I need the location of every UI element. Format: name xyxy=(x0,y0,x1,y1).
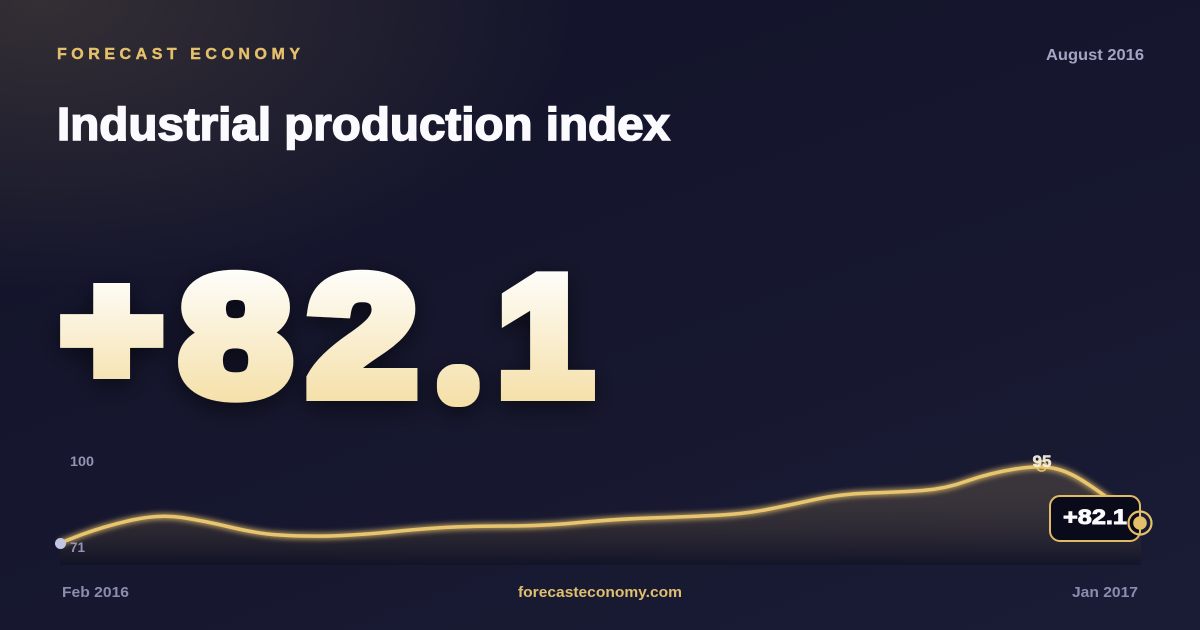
big value xyxy=(62,241,593,430)
chart area fill xyxy=(60,467,1141,565)
badge value: +82.1 xyxy=(1063,506,1127,529)
end marker xyxy=(1128,512,1152,534)
website: forecasteconomy.com xyxy=(518,585,682,601)
start date: Feb 2016 xyxy=(62,585,129,601)
digit 2: 2 xyxy=(308,241,417,430)
peak marker xyxy=(1036,461,1046,471)
axis label min: 71 xyxy=(70,540,86,555)
digit 8: 8 xyxy=(180,243,291,430)
plus sign: + xyxy=(62,241,161,417)
badge box xyxy=(1050,496,1140,541)
decimal point: . xyxy=(453,354,464,398)
line glow xyxy=(60,467,1140,543)
peak label: 95 xyxy=(1033,452,1051,471)
date: August 2016 xyxy=(1046,47,1144,64)
brand label: FORECAST ECONOMY xyxy=(57,46,300,63)
digit 1: 1 xyxy=(497,242,593,430)
end marker dot xyxy=(1133,516,1147,530)
end date: Jan 2017 xyxy=(1072,585,1138,601)
end marker ring xyxy=(1128,512,1152,534)
title: Industrial production index xyxy=(57,98,670,150)
start point xyxy=(55,538,66,549)
data line xyxy=(60,467,1140,543)
value badge xyxy=(1050,496,1140,541)
line chart xyxy=(55,452,1152,565)
axis label max: 100 xyxy=(70,454,94,469)
